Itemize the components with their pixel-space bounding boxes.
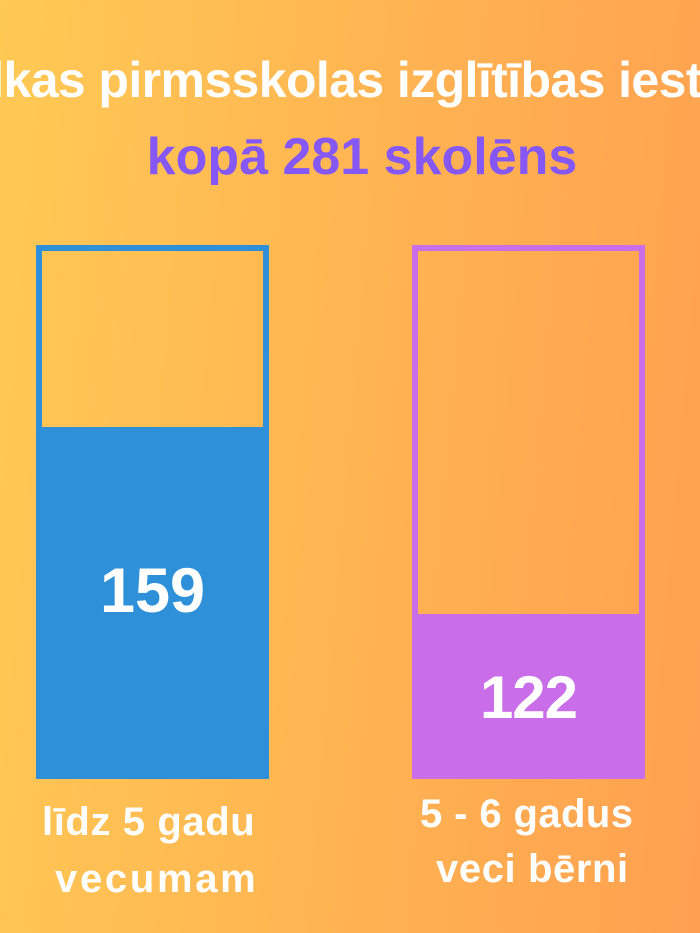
label: 5-6 years: 5 - 6 gadus [420, 792, 633, 836]
label: 5-6 years: veci bērni [436, 847, 629, 891]
bar fill: 159 [36, 427, 269, 779]
label: up to 5 years [42, 800, 258, 901]
subtitle: total: kopā 281 skolēns [147, 128, 577, 186]
value: 122: 122 [480, 664, 577, 731]
bar: 5-6 years [412, 245, 645, 779]
bar: up to 5 years [36, 245, 269, 779]
label: up to 5 years: vecumam [55, 857, 258, 901]
label: up to 5 years: līdz 5 gadu [42, 800, 255, 844]
label: 5-6 years [420, 792, 633, 891]
bar fill: 122 [412, 614, 645, 779]
value: 159: 159 [100, 556, 205, 626]
